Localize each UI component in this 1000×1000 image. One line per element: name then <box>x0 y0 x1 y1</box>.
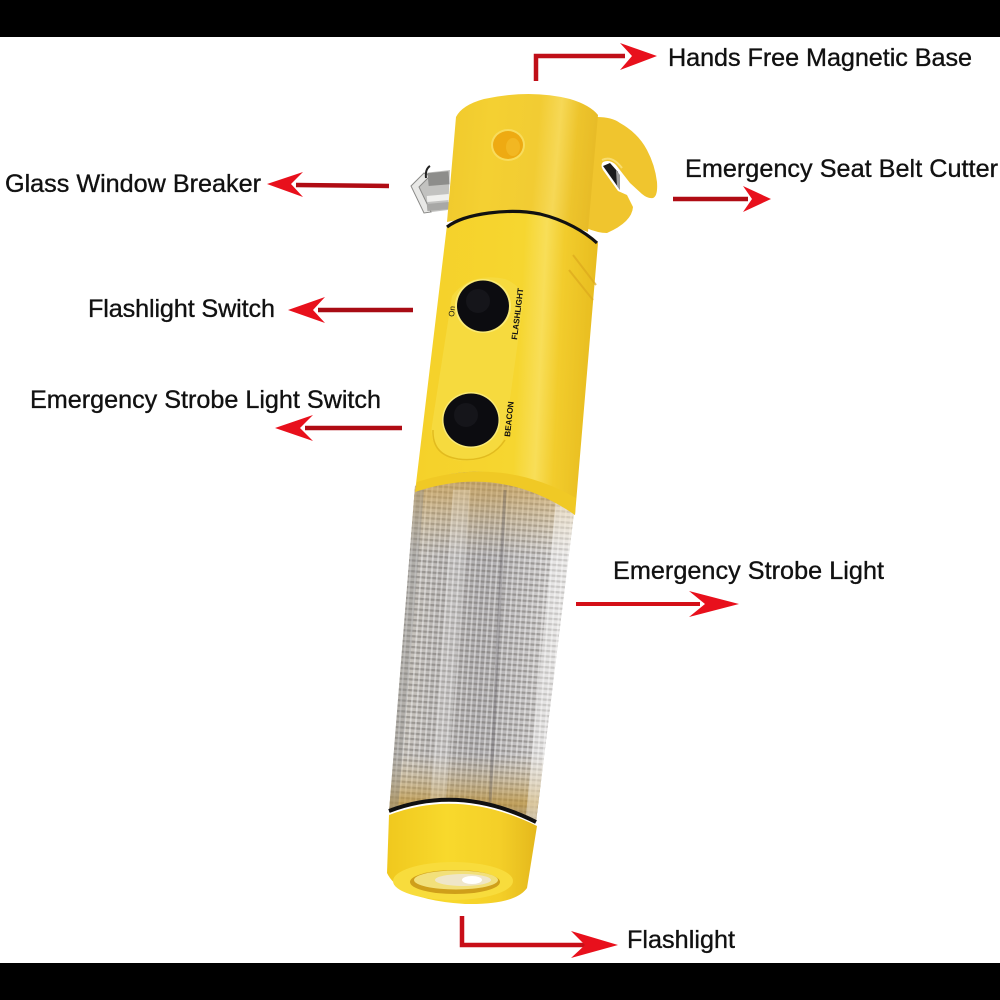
label: emergency strobe light switch: Emergency Strobe Light Switch <box>30 386 381 414</box>
arrow: to strobe light <box>576 591 739 617</box>
strobe switch label: BEACON <box>503 401 516 437</box>
switch panel <box>431 277 523 461</box>
product: emergency car tool <box>380 94 657 904</box>
yellow collar edge above lens <box>415 472 576 515</box>
icon: strobe switch button <box>442 392 500 448</box>
top black band <box>0 0 1000 37</box>
callout: emergency strobe light switch <box>30 386 402 441</box>
callout: hands free magnetic base <box>536 43 972 81</box>
callout: glass window breaker <box>5 170 389 198</box>
bottom yellow cap <box>387 804 537 904</box>
label: glass window breaker: Glass Window Breaker <box>5 170 261 198</box>
label: flashlight switch: Flashlight Switch <box>88 295 275 323</box>
flashlight lens opening <box>393 862 513 900</box>
main handle body <box>415 211 598 515</box>
icon: seat belt cutter hook <box>586 117 657 233</box>
arrow: to flashlight <box>462 916 618 958</box>
label: emergency strobe light: Emergency Strobe Light <box>613 557 884 585</box>
arrow: to glass window breaker <box>267 172 389 197</box>
callout: flashlight switch <box>88 295 413 323</box>
callout: emergency strobe light <box>576 557 884 617</box>
on marker, flashlight switch: On <box>447 306 457 317</box>
callout: emergency seat belt cutter <box>673 155 998 212</box>
icon: magnetic base hole <box>491 129 525 161</box>
label: emergency seat belt cutter: Emergency Seat Belt Cutter <box>685 155 998 183</box>
black ring below cap <box>447 212 597 243</box>
arrow: to seat belt cutter <box>673 186 771 212</box>
strobe light lens <box>389 472 574 820</box>
label: flashlight: Flashlight <box>627 926 735 954</box>
arrow: to flashlight switch <box>288 297 413 323</box>
icon: flashlight switch button <box>455 279 511 333</box>
arrow: to strobe light switch <box>275 415 402 441</box>
callout: flashlight <box>462 916 735 958</box>
arrow: to magnetic base <box>536 43 657 81</box>
upper cap <box>447 94 598 232</box>
black ring above bottom cap <box>389 800 536 822</box>
icon: glass window breaker tip <box>411 166 450 213</box>
flashlight switch label: FLASHLIGHT <box>510 288 525 340</box>
label: hands free magnetic base: Hands Free Magnetic Base <box>668 44 972 72</box>
bottom black band <box>0 963 1000 1000</box>
